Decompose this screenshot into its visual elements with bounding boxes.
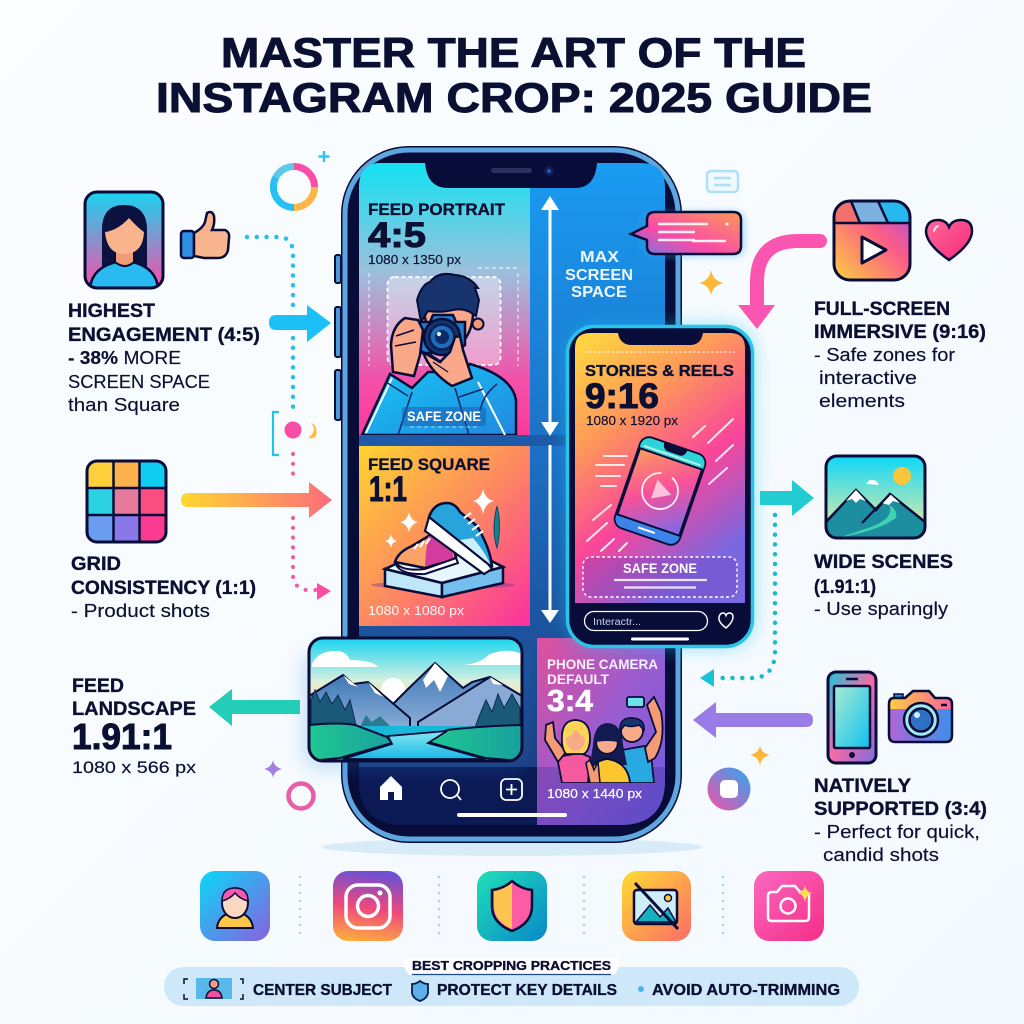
text: feed landscape: 1.91:1 (72, 716, 172, 757)
icon: camera sparkle (754, 871, 824, 941)
heading: feed portrait (368, 201, 505, 267)
heading: phone camera default (547, 660, 658, 712)
heading: feed square: FEED SQUARE (368, 456, 490, 474)
safe zone label: SAFE ZONE (407, 408, 481, 424)
phone body (341, 146, 682, 843)
sparkle: purple (264, 760, 282, 778)
text: natively supported: candid shots (823, 844, 939, 865)
tip: center subject (184, 978, 392, 999)
panel: feed portrait 4:5 (359, 163, 530, 435)
text: natively supported: SUPPORTED (3:4) (814, 798, 987, 820)
heading: phone camera default: PHONE CAMERA (547, 656, 658, 672)
upper shoe (429, 503, 492, 566)
text: wide scenes: WIDE SCENES (814, 551, 953, 573)
arrow: teal to feed landscape (209, 689, 300, 726)
icon: shield (477, 871, 547, 941)
text: feed landscape: 1080 x 566 px (72, 758, 197, 777)
icon: mountain landscape (826, 456, 925, 538)
tip: protect key details: PROTECT KEY DETAILS (437, 982, 617, 999)
arrow: teal to wide scenes (760, 480, 814, 516)
text: highest engagement: ENGAGEMENT (4:5) (68, 324, 260, 346)
small message icon (707, 171, 738, 192)
icon: woman portrait (85, 192, 163, 288)
tip: avoid auto-trimming: AVOID AUTO-TRIMMING (652, 982, 840, 999)
title: MASTER THE ART OF THE (221, 29, 806, 76)
heading: feed square (368, 458, 490, 502)
left friend (557, 753, 590, 783)
dotted connector: pink (293, 454, 316, 590)
chat bubble icon (631, 210, 746, 258)
best cropping practices bar (164, 958, 859, 1006)
ring: pink (288, 784, 314, 808)
icon: instagram (333, 871, 403, 941)
icon: smartphone (828, 672, 876, 763)
landscape card: feed 1.91:1 (302, 638, 530, 770)
sparkle: yellow (699, 270, 724, 295)
icon: outline heart (719, 613, 733, 628)
text: highest engagement: HIGHEST (68, 300, 155, 322)
heading: phone camera default: 3:4 (547, 683, 594, 718)
dimensions: 1080 x 1080 px (368, 603, 465, 618)
center friend (590, 723, 627, 765)
label: max screen space: MAX (580, 249, 620, 266)
title (156, 29, 872, 121)
icon: add (501, 779, 522, 800)
text: wide scenes: - Use sparingly (814, 598, 949, 619)
icon: heart (926, 220, 972, 260)
icon: no cropped image (622, 871, 691, 941)
navigation bar (359, 767, 537, 825)
heading: stories and reels: 1080 x 1920 px (586, 413, 679, 428)
panel: grid consistency (71, 461, 256, 621)
icon: camera (888, 690, 954, 744)
heading: best cropping practices: BEST CROPPING PRACTICES (412, 959, 611, 973)
icon: home (380, 776, 402, 800)
nested phone: stories and reels 9:16 (566, 325, 754, 648)
arrowhead: pink (317, 583, 331, 600)
illustration: three friends selfie (545, 697, 663, 783)
dotted connector: cyan (247, 237, 293, 407)
divider dots (583, 877, 585, 938)
text: full-screen immersive: FULL-SCREEN (814, 298, 950, 320)
text: grid consistency: GRID (71, 553, 121, 575)
panel: feed landscape (72, 675, 197, 777)
lower shoe (395, 534, 456, 568)
text: grid consistency: CONSISTENCY (1:1) (71, 577, 256, 599)
arrowhead: teal (700, 669, 714, 687)
panel: phone camera default 3:4 (537, 638, 665, 825)
text: wide scenes (814, 551, 953, 619)
home indicator (457, 813, 567, 817)
label: max screen space (565, 249, 633, 301)
screen (359, 163, 665, 825)
arrow: pink to stories (757, 241, 820, 310)
comment input bar: Interactr... (593, 617, 641, 628)
illustration: shoes on plinth (371, 503, 515, 597)
bottom icon row (200, 871, 824, 941)
notch (491, 166, 554, 176)
panel: full-screen immersive (738, 201, 986, 411)
heading: feed portrait: FEED PORTRAIT (368, 201, 505, 219)
home indicator (631, 638, 689, 640)
text: full-screen immersive: elements (819, 390, 905, 411)
divider dots (299, 877, 301, 938)
arrow: purple to phone camera default (693, 702, 813, 738)
icon: reels clapper (834, 201, 910, 280)
comment input bar (584, 612, 708, 630)
motion lines (587, 419, 733, 551)
heading: stories and reels: STORIES & REELS (585, 363, 734, 380)
text: wide scenes: (1.91:1) (814, 576, 876, 598)
story screen (575, 333, 745, 603)
text: grid consistency: - Product shots (71, 600, 210, 621)
dotted bracket and accents (273, 412, 317, 455)
main phone (335, 146, 682, 843)
panel: natively supported (814, 672, 987, 865)
heading: stories and reels (585, 363, 734, 428)
safe zone frames (369, 268, 518, 366)
text: full-screen immersive: IMMERSIVE (9:16) (814, 321, 986, 343)
illustration: photographer (362, 274, 516, 435)
decorative ring top (273, 151, 330, 208)
divider dots (438, 877, 440, 938)
safe zone box: SAFE ZONE (623, 560, 697, 576)
right friend (622, 745, 654, 783)
text: grid consistency (71, 553, 256, 621)
text: full-screen immersive: - Safe zones for (814, 344, 955, 365)
title: INSTAGRAM CROP: 2025 GUIDE (156, 74, 872, 121)
phone ground shadow (322, 838, 702, 856)
dimensions: 1080 x 1440 px (547, 786, 643, 801)
icon: thumbs up (181, 212, 229, 258)
label: max screen space: SPACE (571, 284, 627, 301)
text: highest engagement: SCREEN SPACE (68, 371, 210, 392)
text: natively supported: NATIVELY (814, 775, 911, 797)
side buttons (335, 255, 341, 420)
heading: phone camera default: DEFAULT (547, 671, 609, 687)
text: highest engagement: than Square (68, 394, 180, 415)
arrow: max screen space height (541, 196, 559, 623)
sparkles (385, 489, 494, 548)
arrow: yellow to feed square (181, 482, 332, 518)
safe zone box (583, 557, 737, 597)
heading: feed portrait: 1080 x 1350 px (368, 252, 462, 267)
text: feed landscape: FEED (72, 675, 124, 697)
icon: profile (200, 871, 270, 941)
icon: color grid (87, 461, 166, 542)
text: full-screen immersive (814, 298, 986, 411)
tip: center subject: CENTER SUBJECT (253, 982, 392, 999)
heading: stories and reels: 9:16 (585, 377, 659, 416)
panel: feed square 1:1 (359, 446, 530, 626)
icon: search (441, 780, 461, 800)
text: highest engagement: - 38% MORE (68, 347, 181, 368)
panel: highest engagement (68, 192, 260, 415)
icon: record ring (708, 768, 750, 810)
heading: best cropping practices (404, 958, 619, 975)
heading: feed portrait: 4:5 (368, 216, 426, 255)
heading: feed square: 1:1 (369, 470, 407, 509)
label: max screen space: SCREEN (565, 267, 633, 284)
text: natively supported: - Perfect for quick, (814, 821, 980, 842)
sparkle: yellow small (750, 745, 770, 766)
arrow: cyan to feed portrait (269, 305, 331, 342)
illustration: tilted phone with play button (613, 435, 708, 547)
text: feed landscape: LANDSCAPE (72, 698, 196, 720)
text: natively supported (814, 775, 987, 865)
panel: wide scenes (814, 456, 953, 619)
divider dots (722, 877, 724, 938)
dotted connector: teal (718, 515, 775, 678)
text: highest engagement (68, 300, 260, 415)
text: full-screen immersive: interactive (819, 367, 917, 388)
text: feed landscape (72, 675, 197, 777)
